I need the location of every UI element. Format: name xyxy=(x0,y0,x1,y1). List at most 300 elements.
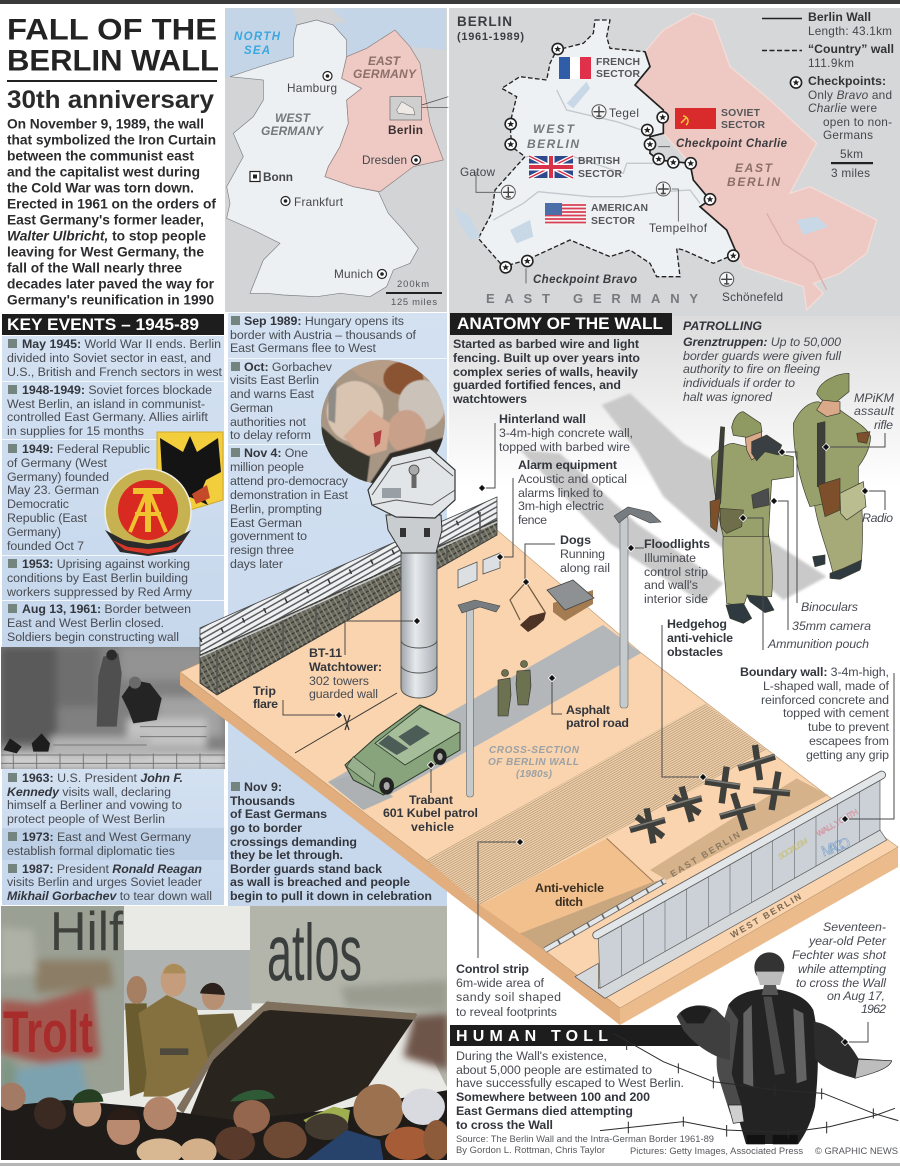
Berlin map legend: Germans xyxy=(823,128,873,142)
patrolling text: authority to fire on fleeing xyxy=(683,362,820,376)
event 1987: Mikhail Gorbachev to tear down wall xyxy=(7,889,212,903)
label: dogs: Dogs xyxy=(560,533,591,547)
soldier equipment labels: assault xyxy=(854,404,895,418)
soldier equipment labels: Ammunition pouch xyxy=(767,637,869,651)
patrolling text xyxy=(683,319,842,404)
label: hinterland wall xyxy=(499,412,633,454)
photo: Gorbachev and Honecker xyxy=(320,357,447,483)
introduction text: decades later paved the way for xyxy=(7,276,215,292)
human toll text: During the Wall's existence, xyxy=(456,1049,607,1063)
event 1963: protect people of West Berlin xyxy=(7,812,165,826)
event Aug 1961 xyxy=(7,602,191,644)
asphalt patrol road xyxy=(328,625,641,810)
event Nov 9: begin to pull it down in celebration xyxy=(230,889,432,903)
graffiti on the wall: Trolt xyxy=(3,1000,93,1065)
event 1949: Germany) founded xyxy=(7,470,109,484)
event May 1945: May 1945: World War II ends. Berlin xyxy=(22,337,221,351)
map labels and city markers: GERMANY xyxy=(261,124,324,138)
front soldier xyxy=(710,412,793,623)
anti-vehicle ditch xyxy=(480,838,665,950)
label: asphalt patrol road xyxy=(566,703,629,730)
source and credits xyxy=(456,1133,898,1156)
fence xyxy=(200,497,497,695)
watchtower xyxy=(368,448,455,698)
caption: Peter Fechter: while attempting xyxy=(798,962,886,976)
label: floodlights xyxy=(644,537,710,606)
Berlin map legend: 111.9km xyxy=(808,56,854,70)
human toll text: about 5,000 people are estimated to xyxy=(456,1063,652,1077)
label: Trabant: vehicle xyxy=(411,820,454,834)
introduction text: fall of the Wall nearly three xyxy=(7,260,182,276)
caption: Peter Fechter: Seventeen- xyxy=(823,920,886,934)
event Nov 4: government to xyxy=(230,529,307,543)
Berlin map legend: Checkpoints: xyxy=(808,74,886,88)
heading: human toll: HUMAN TOLL xyxy=(456,1028,608,1045)
label: anti-vehicle ditch xyxy=(535,881,604,909)
event 1949: of Germany (West xyxy=(7,456,108,470)
event May 1945: divided into Soviet sector in east, and xyxy=(7,351,211,365)
bullets xyxy=(8,339,17,873)
label: cross-section: CROSS-SECTION xyxy=(489,745,580,756)
event 1948-1949: 1948-1949: Soviet forces blockade xyxy=(22,383,212,397)
illustration: wall cross-section base xyxy=(180,530,898,1025)
event Nov 9: they be let through. xyxy=(230,848,343,862)
label: floodlights: Floodlights xyxy=(644,537,710,551)
anatomy intro text xyxy=(452,337,640,406)
source and credits: By Gordon L. Rottman, Chris Taylor xyxy=(456,1144,605,1155)
label: cross-section: OF BERLIN WALL xyxy=(488,757,579,768)
patrolling text: halt was ignored xyxy=(683,390,773,404)
bullets xyxy=(231,316,240,791)
Berlin map labels: BERLIN xyxy=(527,137,579,151)
event Nov 4: million people xyxy=(230,460,304,474)
panel: key events column one xyxy=(2,336,224,647)
map labels and city markers: Dresden xyxy=(362,153,407,167)
Berlin map labels: (1961-1989) xyxy=(457,31,524,43)
graffiti on the wall: Hilf xyxy=(50,900,124,962)
introduction text: the Cold War was torn down. xyxy=(7,180,194,196)
event 1987: 1987: President Ronald Reagan xyxy=(22,862,202,876)
photo right wall segment xyxy=(250,906,448,1090)
Berlin map labels xyxy=(457,14,788,306)
patrolling text: Grenztruppen: Up to 50,000 xyxy=(683,335,841,349)
title: FALL OF THE xyxy=(7,14,217,46)
events text: column one xyxy=(6,337,223,903)
rear soldier xyxy=(793,373,871,579)
leader dots xyxy=(335,443,869,1046)
introduction text xyxy=(7,116,216,308)
floodlight far xyxy=(614,507,661,708)
event 1948-1949: in supplies for 15 months xyxy=(7,424,144,438)
Berlin map legend: 5km xyxy=(840,147,863,161)
label: dogs xyxy=(560,533,610,575)
East Berlin territory xyxy=(635,13,877,310)
Berlin map legend: Length: 43.1km xyxy=(808,24,892,38)
boundary wall xyxy=(597,775,882,988)
label: control strip: Control strip xyxy=(456,962,529,976)
label: asphalt patrol road: Asphalt xyxy=(566,703,610,717)
Berlin map labels: SECTOR xyxy=(596,69,640,80)
label: trip flare: flare xyxy=(253,697,278,711)
event 1987: visits Berlin and urges Soviet leader xyxy=(7,875,202,889)
patrolling text: individuals if order to xyxy=(683,376,795,390)
event Sep 1989 xyxy=(230,314,417,355)
photo background building xyxy=(123,950,252,1010)
event 1963: 1963: U.S. President John F. xyxy=(22,771,183,785)
photo: building the wall 1961 xyxy=(0,647,227,770)
soldier shadows xyxy=(520,393,827,603)
label: Trabant xyxy=(383,793,478,834)
label: cross-section xyxy=(488,745,580,780)
photo soldiers xyxy=(125,963,238,1097)
label: asphalt patrol road: patrol road xyxy=(566,716,629,730)
event May 1945 xyxy=(7,337,223,379)
map labels and city markers: Hamburg xyxy=(287,81,337,95)
label: hedgehog obstacles: Hedgehog xyxy=(667,617,727,631)
Berlin map labels: BRITISH xyxy=(578,156,620,167)
victim Peter Fechter figure xyxy=(450,952,898,1144)
barbed wire xyxy=(600,1033,898,1138)
caption: Peter Fechter: on Aug 17, xyxy=(827,989,885,1003)
event Nov 9: crossings demanding xyxy=(230,835,357,849)
source and credits: Pictures: Getty Images, Associated Press xyxy=(630,1145,803,1156)
event Nov 4: Berlin, prompting xyxy=(230,502,322,516)
soldier equipment labels: 35mm camera xyxy=(792,619,871,633)
label: hinterland wall: topped with barbed wire xyxy=(499,440,630,454)
event 1948-1949: controlled East Germany. Allies airlift xyxy=(7,410,209,424)
Berlin map legend: “Country” wall xyxy=(808,42,894,56)
label: dogs: along rail xyxy=(560,561,610,575)
Berlin map labels: FRENCH xyxy=(596,57,640,68)
photo concrete slab xyxy=(177,1002,417,1123)
wall labels: EAST BERLIN xyxy=(669,830,742,879)
event Nov 9: Border guards stand back xyxy=(230,862,382,876)
event Sep 1989: East Germans flee to West xyxy=(230,341,377,355)
event 1963 xyxy=(7,771,183,826)
introduction text: Erected in 1961 on the orders of xyxy=(7,196,216,212)
event Sep 1989: border with Austria – thousands of xyxy=(230,328,417,342)
event Aug 1961: Aug 13, 1961: Border between xyxy=(22,602,191,616)
Berlin map legend: open to non- xyxy=(823,115,892,129)
event Oct: to delay reform xyxy=(230,428,311,442)
event Oct: authorities not xyxy=(230,415,307,429)
event 1949 xyxy=(7,442,150,553)
map labels and city markers: Bonn xyxy=(263,170,293,184)
event 1949: Germany) xyxy=(7,525,61,539)
event 1973: establish formal diplomatic ties xyxy=(7,844,175,858)
event 1949: May 23. German xyxy=(7,483,99,497)
label: control strip: to reveal footprints xyxy=(456,1005,557,1019)
human toll text: to cross the Wall xyxy=(456,1118,553,1132)
title: BERLIN WALL xyxy=(7,44,219,78)
heading: anatomy of the wall: ANATOMY OF THE WALL xyxy=(457,314,663,333)
label: BT-11 watchtower xyxy=(309,646,382,701)
map: Berlin divided xyxy=(449,8,900,316)
label: floodlights: and wall's xyxy=(644,578,698,592)
label: floodlights: interior side xyxy=(644,592,708,606)
event Nov 4: East German xyxy=(230,516,302,530)
event 1949: 1949: Federal Republic xyxy=(22,442,150,456)
human toll text: Somewhere between 100 and 200 xyxy=(456,1090,650,1104)
event 1973: 1973: East and West Germany xyxy=(22,830,192,844)
human toll text: East Germans died attempting xyxy=(456,1104,633,1118)
patrolling text: PATROLLING xyxy=(683,319,762,333)
Berlin map labels: Tempelhof xyxy=(649,221,708,235)
subtitle: 30th anniversary: 30th anniversary xyxy=(7,86,214,114)
soldier equipment labels xyxy=(767,391,895,651)
label: alarm equipment: alarms linked to xyxy=(518,486,603,500)
introduction text: On November 9, 1989, the wall xyxy=(7,116,204,132)
anatomy intro text: fencing. Built up over years into xyxy=(453,351,640,365)
caption: Peter Fechter: Fechter was shot xyxy=(792,948,887,962)
map: Germany xyxy=(225,8,448,312)
checkpoints and airports xyxy=(500,43,739,286)
human toll text xyxy=(456,1049,684,1132)
anatomy intro text: complex series of walls, heavily xyxy=(453,365,638,379)
Berlin map legend: Only Bravo and xyxy=(808,88,892,102)
Berlin map labels: AMERICAN xyxy=(591,203,648,214)
Berlin map labels: EAST xyxy=(735,161,774,175)
label: BT-11 watchtower: BT-11 xyxy=(309,646,342,660)
label: Trabant: 601 Kubel patrol xyxy=(383,806,478,820)
Berlin map labels: SOVIET xyxy=(721,108,761,119)
event 1973 xyxy=(7,830,192,858)
coat of arms: East Germany xyxy=(105,469,191,556)
event 1949: founded Oct 7 xyxy=(7,539,84,553)
event Aug 1961: East and West Berlin closed. xyxy=(7,616,164,630)
event 1953 xyxy=(6,557,193,599)
panel: right background fade xyxy=(449,316,900,486)
event 1949: Republic (East xyxy=(7,511,88,525)
sector flags xyxy=(529,57,716,226)
wall labels: WEST BERLIN xyxy=(729,891,803,940)
carried victim xyxy=(677,1005,892,1078)
event Oct: and warns East xyxy=(230,387,315,401)
event Nov 4 xyxy=(230,446,349,571)
introduction text: between the communist east xyxy=(7,148,194,164)
label: boundary wall xyxy=(740,665,890,762)
event Aug 1961: Soldiers begin constructing wall xyxy=(7,630,179,644)
leader lines xyxy=(283,423,894,1042)
event Nov 9: go to border xyxy=(230,821,302,835)
events text: column two xyxy=(230,314,432,903)
event 1953: workers suppressed by Red Army xyxy=(6,585,193,599)
label: Trabant: Trabant xyxy=(409,793,453,807)
introduction text: and the capitalist west during xyxy=(7,164,200,180)
map labels and city markers: Frankfurt xyxy=(294,195,344,209)
trip flare wire xyxy=(295,693,397,753)
event 1948-1949: West Berlin, an island in communist- xyxy=(7,397,205,411)
Berlin map legend: 3 miles xyxy=(831,166,870,180)
map labels and city markers: 125 miles xyxy=(391,296,437,307)
lakes and rivers xyxy=(453,82,828,243)
header black band: human toll xyxy=(450,1025,700,1046)
Berlin map labels: SECTOR xyxy=(721,120,765,131)
event Oct: visits East Berlin xyxy=(230,373,319,387)
Berlin map labels: Schönefeld xyxy=(722,290,783,304)
introduction text: Walter Ulbricht, to stop people xyxy=(7,228,206,244)
alarm boxes xyxy=(458,553,500,588)
source and credits: © GRAPHIC NEWS xyxy=(815,1145,898,1156)
event Nov 9: Thousands xyxy=(230,794,295,808)
label: boundary wall: reinforced concrete and xyxy=(761,693,889,707)
introduction text: East Germany's former leader, xyxy=(7,212,204,228)
introduction text: that symbolized the Iron Curtain xyxy=(7,132,216,148)
control strip stripes xyxy=(427,703,767,905)
label: boundary wall: Boundary wall: 3-4m-high, xyxy=(740,665,889,679)
label: hinterland wall: Hinterland wall xyxy=(499,412,586,426)
West Berlin territory xyxy=(478,20,737,277)
heading: key events: KEY EVENTS – 1945-89 xyxy=(7,315,199,334)
floodlight near xyxy=(458,600,500,797)
soldier equipment labels: Binoculars xyxy=(801,600,858,614)
label: hedgehog obstacles: obstacles xyxy=(667,645,723,659)
event Oct: German xyxy=(230,401,273,415)
photo crowd xyxy=(0,1083,450,1165)
patrolling text: border guards were given full xyxy=(683,349,842,363)
dog on rail xyxy=(510,582,546,632)
event 1949: Democratic xyxy=(7,497,69,511)
anatomy intro text: guarded fortified fences, and xyxy=(453,378,621,392)
boundary wall: WALL YOUTH xyxy=(815,807,860,838)
caption: Peter Fechter: to cross the Wall xyxy=(796,976,887,990)
map labels and city markers: SEA xyxy=(244,45,270,57)
label: boundary wall: tube to prevent xyxy=(808,720,890,734)
photo: crowd pulling down the wall xyxy=(0,900,450,1165)
Berlin map labels: Checkpoint Charlie xyxy=(676,138,788,150)
map labels and city markers: 200km xyxy=(397,278,429,289)
label: BT-11 watchtower: Watchtower: xyxy=(309,660,382,674)
graffiti on the wall: atlos xyxy=(267,908,362,997)
Berlin map legend: Charlie were xyxy=(808,101,877,115)
boundary wall: MACO xyxy=(819,835,853,860)
map labels and city markers: WEST xyxy=(275,111,312,125)
patrol guards on road xyxy=(498,660,531,716)
event Sep 1989: Sep 1989: Hungary opens its xyxy=(244,314,404,328)
label: boundary wall: escapees from xyxy=(809,734,889,748)
Berlin map labels: SECTOR xyxy=(578,169,622,180)
label: hinterland wall: 3-4m-high concrete wall, xyxy=(499,426,633,440)
Berlin map labels: Tegel xyxy=(609,106,639,120)
panel: key events column two xyxy=(228,313,447,906)
event Nov 4: attend pro-democracy xyxy=(230,474,349,488)
concrete curb xyxy=(545,881,665,950)
East Berlin strip xyxy=(650,778,828,880)
Berlin map labels: BERLIN xyxy=(457,14,512,29)
event 1948-1949 xyxy=(7,383,212,438)
label: trip flare xyxy=(253,684,278,711)
anatomy intro text: watchtowers xyxy=(452,392,527,406)
label: control strip: sandy soil shaped xyxy=(456,990,561,1004)
graffiti on the wall xyxy=(4,910,360,1052)
source and credits: Source: The Berlin Wall and the Intra-German Border 1961-89 xyxy=(456,1133,714,1144)
caption: Peter Fechter xyxy=(792,920,887,1016)
wall labels xyxy=(669,830,803,940)
Berlin map legend xyxy=(762,10,894,180)
label: cross-section: (1980s) xyxy=(516,769,553,780)
label: control strip xyxy=(456,962,561,1019)
map labels and city markers: Berlin xyxy=(388,123,423,137)
label: anti-vehicle ditch: Anti-vehicle xyxy=(535,881,604,895)
event Nov 4: demonstration in East xyxy=(230,488,349,502)
event 1987 xyxy=(7,862,212,903)
human toll text: have successfully escaped to West Berlin. xyxy=(456,1076,684,1090)
event 1963: Kennedy visits wall, declaring xyxy=(7,785,171,799)
Berlin map labels: WEST xyxy=(533,122,576,136)
tower column xyxy=(401,548,437,698)
event Nov 9 xyxy=(230,780,432,903)
coat of arms: West Germany xyxy=(157,432,223,510)
Berlin map labels: BERLIN xyxy=(727,175,780,189)
map labels and city markers: EAST xyxy=(368,54,402,68)
Berlin map labels: Gatow xyxy=(460,165,495,179)
label: control strip: 6m-wide area of xyxy=(456,976,545,990)
event 1953: conditions by East Berlin building xyxy=(7,571,188,585)
tower cabin xyxy=(386,515,442,553)
label: anti-vehicle ditch: ditch xyxy=(555,895,583,909)
label: alarm equipment: Acoustic and optical xyxy=(518,472,627,486)
title xyxy=(7,14,219,82)
dog kennel xyxy=(547,580,594,621)
label: BT-11 watchtower: guarded wall xyxy=(309,687,378,701)
soldier equipment labels: rifle xyxy=(874,418,893,432)
Berlin map legend: Berlin Wall xyxy=(808,10,871,24)
caption: Peter Fechter: year-old Peter xyxy=(808,934,887,948)
soldier equipment labels: MPiKM xyxy=(854,391,895,405)
event Oct xyxy=(230,360,333,442)
event 1963: himself a Berliner and vowing to xyxy=(7,798,182,812)
event Nov 9: Nov 9: xyxy=(244,780,282,794)
map labels and city markers: Munich xyxy=(334,267,373,281)
guard carrying victim xyxy=(717,952,818,1144)
event Oct: Oct: Gorbachev xyxy=(244,360,333,374)
label: BT-11 watchtower: 302 towers xyxy=(309,674,369,688)
event Nov 4: days later xyxy=(230,557,283,571)
label: hedgehog obstacles: anti-vehicle xyxy=(667,631,733,645)
Berlin map labels: Checkpoint Bravo xyxy=(533,274,637,286)
anatomy intro text: Started as barbed wire and light xyxy=(453,337,639,351)
label: floodlights: control strip xyxy=(644,565,708,579)
label: alarm equipment xyxy=(518,458,627,527)
map labels and city markers xyxy=(234,31,442,307)
label: boundary wall: L-shaped wall, made of xyxy=(763,679,890,693)
panel: key events lower xyxy=(2,769,224,905)
label: alarm equipment: Alarm equipment xyxy=(518,458,617,472)
label: trip flare: Trip xyxy=(253,684,276,698)
Berlin map labels: EAST GERMANY xyxy=(486,291,698,306)
boundary wall foot xyxy=(575,830,887,998)
label: boundary wall: getting any grip xyxy=(806,748,889,762)
event May 1945: U.S., British and French sectors in west xyxy=(7,365,223,379)
label: hedgehog obstacles xyxy=(667,617,733,659)
label: floodlights: Illuminate xyxy=(644,551,696,565)
label: boundary wall: topped with cement xyxy=(783,706,890,720)
hedgehog anti-vehicle obstacles xyxy=(630,745,790,843)
event Nov 9: of East Germans xyxy=(230,807,327,821)
Berlin map labels: SECTOR xyxy=(591,216,635,227)
boundary wall: SOCIALISM xyxy=(776,836,810,862)
soldiers patrolling xyxy=(710,373,871,623)
map labels and city markers: NORTH xyxy=(234,31,281,43)
airport leaders xyxy=(476,147,678,283)
soldier equipment labels: Radio xyxy=(862,511,893,525)
event 1953: 1953: Uprising against working xyxy=(22,557,190,571)
label: alarm equipment: fence xyxy=(518,513,547,527)
caption: Peter Fechter: 1962 xyxy=(861,1002,886,1016)
event Nov 9: as wall is breached and people xyxy=(230,875,410,889)
photo left wall segment xyxy=(0,906,124,1113)
tower deck xyxy=(368,448,455,518)
